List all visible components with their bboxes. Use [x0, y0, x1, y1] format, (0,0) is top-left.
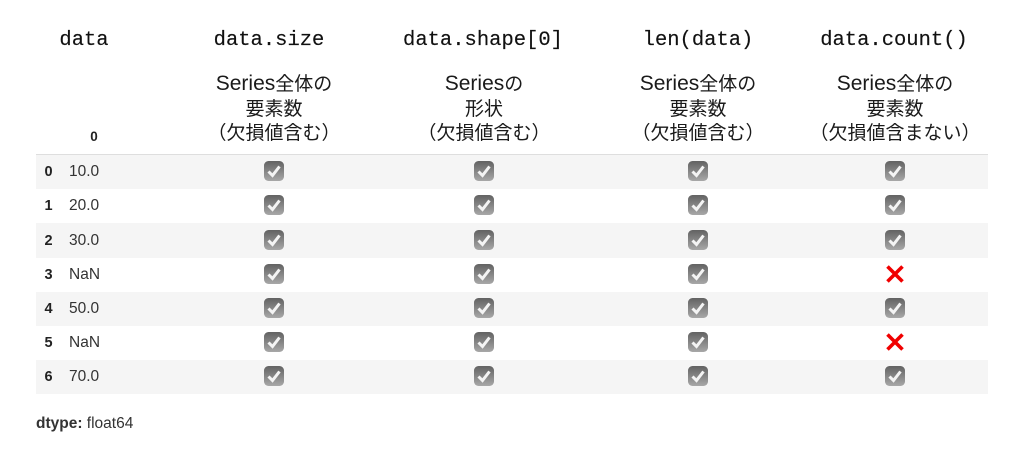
description: data.size: [207, 72, 340, 144]
code label: data.count(): data.count(): [820, 29, 968, 52]
header: column labels: [59, 29, 980, 144]
row 2: [44, 230, 905, 250]
row 3: 3: [44, 267, 53, 283]
description: data.shape[0]: Seriesの: [445, 72, 523, 95]
row 6: [44, 366, 905, 386]
description: data.count(): （欠損値含まない）: [809, 123, 980, 144]
row 3: [44, 264, 904, 284]
row 4: 4: [44, 301, 53, 317]
description: len(data): Series全体の: [640, 72, 756, 95]
description: data.count(): [809, 72, 980, 144]
row 2: 2: [44, 233, 53, 249]
row 5: [44, 332, 904, 352]
row 1: [44, 195, 905, 215]
description: data.size: （欠損値含む）: [207, 123, 340, 144]
dtype footer: dtype: float64: [36, 415, 133, 432]
code label: len(data): len(data): [643, 29, 753, 52]
row 6: 70.0: [69, 368, 99, 385]
code label: data: data: [59, 29, 109, 52]
row 2: 30.0: [69, 232, 99, 249]
row 5: 5: [44, 335, 53, 351]
index header: 0: [90, 129, 98, 144]
row 0: 0: [44, 164, 53, 180]
code label: data.shape[0]: data.shape[0]: [403, 29, 563, 52]
code label: data.size: data.size: [214, 29, 324, 52]
description: len(data): [631, 72, 764, 144]
row 4: [44, 298, 905, 318]
row 0: [44, 161, 905, 181]
description: data.shape[0]: 形状: [465, 98, 503, 120]
header rule: [36, 154, 988, 155]
description: data.count(): 要素数: [866, 98, 924, 120]
row 1: 1: [44, 198, 53, 214]
table body: [36, 155, 988, 394]
row 4: 50.0: [69, 300, 99, 317]
description: data.size: Series全体の: [216, 72, 332, 95]
description: data.shape[0]: [417, 72, 550, 144]
description: data.count(): Series全体の: [837, 72, 953, 95]
row 3: NaN: [69, 266, 100, 283]
row 6: 6: [44, 369, 53, 385]
description: data.size: 要素数: [245, 98, 302, 120]
description: len(data): （欠損値含む）: [631, 123, 764, 144]
description: data.shape[0]: （欠損値含む）: [417, 123, 550, 144]
row 1: 20.0: [69, 197, 99, 214]
description: len(data): 要素数: [669, 98, 726, 120]
row 0: 10.0: [69, 163, 99, 180]
row 5: NaN: [69, 334, 100, 351]
